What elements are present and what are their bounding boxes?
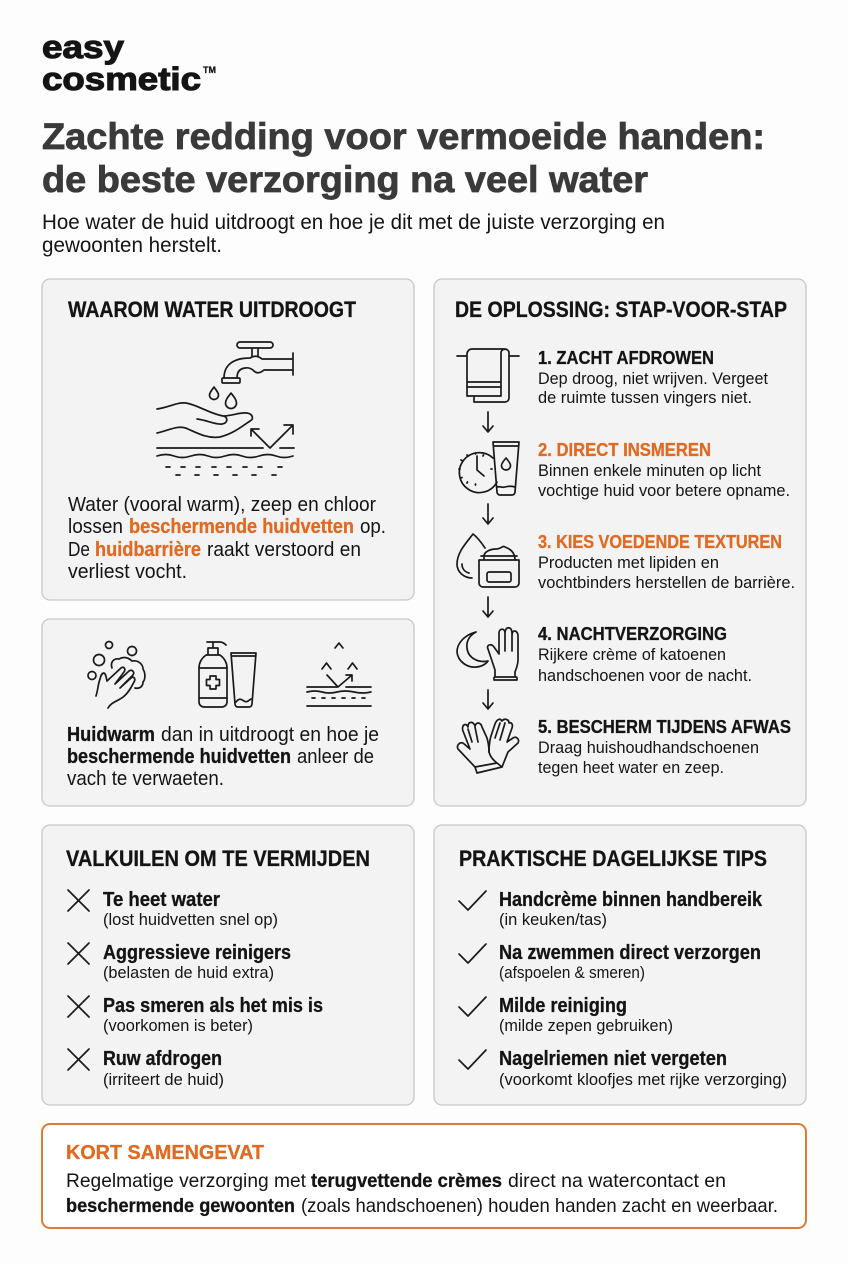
item 2: Aggressieve reinigers <box>103 942 291 964</box>
item 3: (voorkomen is beter) <box>103 1017 253 1035</box>
icon: check <box>459 944 486 963</box>
icon: cross <box>68 943 89 964</box>
tip 4 <box>499 1048 787 1089</box>
panel: drie iconen met tekst <box>42 619 414 806</box>
tip 2: (afspoelen & smeren) <box>499 964 645 982</box>
body text: raakt verstoord en <box>207 538 361 561</box>
icon: cross <box>68 890 89 911</box>
icon: check <box>459 891 486 910</box>
tip 4: (voorkomt kloofjes met rijke verzorging) <box>499 1071 787 1089</box>
body text <box>68 493 386 583</box>
item 3: Pas smeren als het mis is <box>103 995 323 1017</box>
subtitle <box>42 210 665 257</box>
icon: clock and tube <box>459 442 519 495</box>
item 1 <box>103 889 278 929</box>
tip 1: (in keuken/tas) <box>499 911 607 929</box>
icon: cross <box>68 1049 89 1070</box>
summary text <box>66 1170 778 1217</box>
arrow <box>483 690 493 709</box>
summary text: Regelmatige verzorging met <box>66 1170 307 1192</box>
item 4: (irriteert de huid) <box>103 1071 224 1089</box>
title: Zachte redding voor vermoeide handen: <box>42 116 765 157</box>
summary text: beschermende gewoonten <box>66 1195 295 1217</box>
step 5: tegen heet water en zeep. <box>538 758 724 777</box>
tip 1 <box>499 889 763 929</box>
panel: valkuilen om te vermijden <box>42 825 414 1105</box>
icon: check <box>459 997 486 1016</box>
item 1: (lost huidvetten snel op) <box>103 911 278 929</box>
icon: skin barrier with arrows <box>307 643 371 706</box>
item 4: Ruw afdrogen <box>103 1048 222 1070</box>
heading: KORT SAMENGEVAT <box>66 1141 264 1164</box>
tip 1: Handcrème binnen handbereik <box>499 889 763 911</box>
icon: towel <box>457 349 519 402</box>
tip 3 <box>499 995 673 1035</box>
icon: drop and cream jar <box>457 534 519 587</box>
logo <box>42 29 216 97</box>
icon: tap, hand and skin <box>157 342 294 475</box>
body text: huidbarrière <box>95 538 201 561</box>
tip 3: Milde reiniging <box>499 995 627 1017</box>
item 1: Te heet water <box>103 889 220 911</box>
body text: lossen <box>68 515 123 538</box>
summary text: (zoals handschoenen) houden handen zacht en weerbaar. <box>301 1195 778 1217</box>
heading: VALKUILEN OM TE VERMIJDEN <box>66 846 370 871</box>
step 2: Binnen enkele minuten op licht <box>538 461 761 480</box>
icon: moon and glove <box>457 628 518 680</box>
step 1 <box>538 347 768 407</box>
panel: praktische dagelijkse tips <box>434 825 806 1105</box>
item 3 <box>103 995 323 1035</box>
icon: household gloves <box>457 719 519 773</box>
body text: dan in uitdroogt en hoe je <box>161 723 379 746</box>
step 1: 1. ZACHT AFDROWEN <box>538 347 714 368</box>
subtitle: Hoe water de huid uitdroogt en hoe je dit met de juiste verzorging en <box>42 210 665 234</box>
icon: check <box>459 1050 486 1069</box>
arrow <box>483 597 493 617</box>
item 2 <box>103 942 291 982</box>
tip 2 <box>499 942 761 982</box>
title <box>42 116 765 200</box>
step 4: Rijkere crème of katoenen <box>538 645 726 664</box>
tip 2: Na zwemmen direct verzorgen <box>499 942 761 964</box>
item 4 <box>103 1048 224 1089</box>
step 2: vochtige huid voor betere opname. <box>538 481 790 500</box>
step 3: 3. KIES VOEDENDE TEXTUREN <box>538 531 782 552</box>
step 3: Producten met lipiden en <box>538 553 719 572</box>
heading: DE OPLOSSING: STAP-VOOR-STAP <box>455 297 787 322</box>
step 5 <box>538 716 791 777</box>
body text: anleer de <box>297 745 374 768</box>
summary text: terugvettende crèmes <box>311 1170 502 1192</box>
body text: beschermende huidvetten <box>67 745 291 768</box>
subtitle: gewoonten herstelt. <box>42 233 222 257</box>
step 2: 2. DIRECT INSMEREN <box>538 439 711 460</box>
tip 3: (milde zepen gebruiken) <box>499 1017 673 1035</box>
arrow <box>483 504 493 524</box>
item 2: (belasten de huid extra) <box>103 964 274 982</box>
icon: cross <box>68 996 89 1017</box>
body text: vach te verwaeten. <box>67 767 224 790</box>
logo: easy <box>42 29 124 65</box>
step 5: 5. BESCHERM TIJDENS AFWAS <box>538 716 791 737</box>
heading: PRAKTISCHE DAGELIJKSE TIPS <box>459 846 767 871</box>
body text: verliest vocht. <box>68 560 187 583</box>
arrow <box>483 412 493 432</box>
body text: beschermende huidvetten <box>129 515 354 538</box>
title: de beste verzorging na veel water <box>42 159 648 200</box>
panel: kort samengevat <box>42 1124 806 1228</box>
step 1: de ruimte tussen vingers niet. <box>538 388 752 407</box>
body text: De <box>68 538 90 561</box>
step 4 <box>538 623 752 685</box>
step 2 <box>538 439 790 500</box>
body text: Water (vooral warm), zeep en chloor <box>68 493 376 516</box>
step 4: handschoenen voor de nacht. <box>538 666 752 685</box>
step 4: 4. NACHTVERZORGING <box>538 623 727 644</box>
logo: TM <box>203 65 216 75</box>
step 3: vochtbinders herstellen de barrière. <box>538 573 795 592</box>
body text: Huidwarm <box>67 723 155 746</box>
icon: pump bottle and tube <box>199 642 256 707</box>
panel: waarom water uitdroogt <box>42 279 414 600</box>
icon: soapy hand <box>88 642 145 708</box>
step 1: Dep droog, niet wrijven. Vergeet <box>538 369 768 388</box>
body text <box>67 723 379 790</box>
step 5: Draag huishoudhandschoenen <box>538 738 759 757</box>
body text: op. <box>360 515 386 538</box>
logo: cosmetic <box>42 61 201 97</box>
heading: WAAROM WATER UITDROOGT <box>68 297 356 322</box>
panel: de oplossing stap-voor-stap <box>434 279 806 806</box>
step 3 <box>538 531 795 592</box>
tip 4: Nagelriemen niet vergeten <box>499 1048 727 1070</box>
summary text: direct na watercontact en <box>508 1170 726 1192</box>
